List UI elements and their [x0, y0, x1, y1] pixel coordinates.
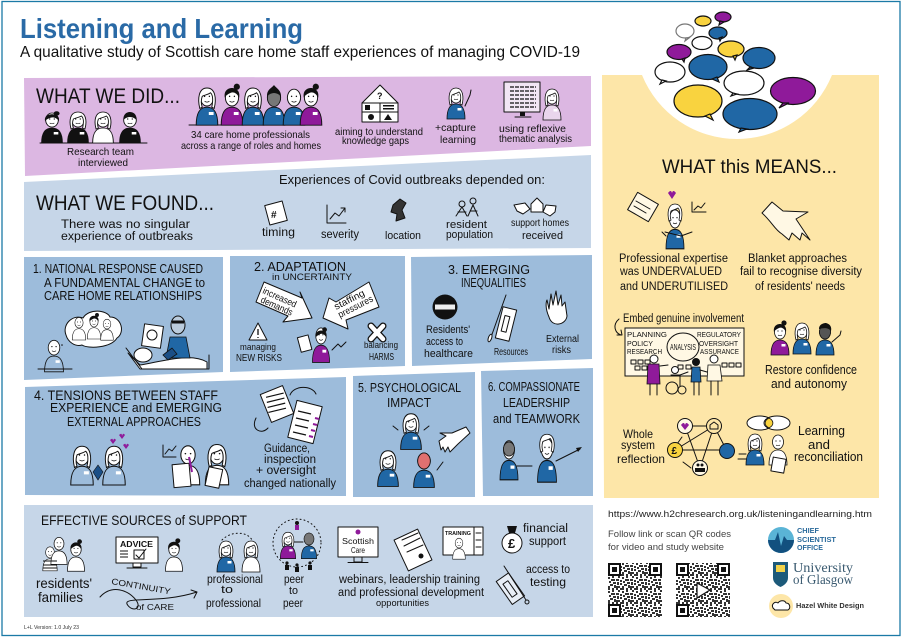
icon: knowledge house — [362, 85, 398, 122]
figure: staff member with clipboard — [297, 327, 346, 362]
label: residents' families: families — [38, 589, 83, 605]
heading 3: INEQUALITIES — [461, 275, 526, 290]
text: no singular experience — [61, 219, 193, 243]
heading 3: 3. EMERGING — [448, 262, 530, 277]
diagram: whole system network — [668, 418, 734, 476]
label: professional expertise: Professional expertise — [619, 253, 728, 265]
board with analysis diagram: POLICY — [627, 341, 653, 348]
label: managing new risks — [236, 342, 282, 364]
heading 4 — [34, 387, 222, 429]
icon: blanket hand — [762, 202, 810, 240]
diagram: whole system network: £ — [672, 446, 678, 457]
label: balancing harms: balancing — [364, 340, 398, 351]
arrow: curved to board — [615, 319, 622, 335]
icon: cross — [371, 326, 383, 339]
label: residents' access — [424, 324, 473, 360]
label: peer to peer — [283, 572, 304, 610]
arrow: staffing pressures — [323, 282, 379, 329]
heading 5 — [358, 380, 461, 410]
label: learning and reconciliation: reconciliation — [794, 450, 863, 464]
label: 34 care home professionals — [181, 129, 321, 152]
label: peer to peer: to — [289, 585, 298, 597]
label: blanket approaches: Blanket approaches — [748, 253, 847, 265]
subtitle: A qualitative study of Scottish care home staff experiences of managing COVID-19 — [20, 44, 580, 61]
label: capture learning: +capture — [435, 122, 476, 134]
heading: effective sources: EFFECTIVE SOURCES of SUPPORT — [41, 512, 247, 528]
figures: peer support circle — [273, 519, 321, 572]
heading 2: 2. ADAPTATION — [254, 259, 346, 274]
label: reflexive thematic analysis — [499, 123, 572, 145]
label: residents' families — [36, 575, 92, 605]
text: embed genuine involvement: Embed genuine involvement — [623, 313, 745, 325]
icon: scottish care monitor: Scottish — [342, 537, 374, 546]
panel: what we found — [24, 155, 591, 251]
label: managing new risks: NEW RISKS — [236, 353, 282, 364]
link: https://www.h2chresearch.org.uk/listeningandlearning.htm — [608, 509, 872, 520]
research team figures — [40, 111, 147, 143]
label: managing new risks: managing — [240, 342, 276, 353]
figures at the board — [647, 355, 722, 395]
label: balancing harms: HARMS — [369, 352, 394, 363]
label: aiming to understand knowledge gaps: knowledge gaps — [342, 136, 409, 147]
panel 5: psychological impact — [353, 372, 475, 497]
label: restore confidence — [765, 363, 857, 391]
illustration: professional with certificate, heart and chart — [628, 191, 706, 249]
logo: university of glasgow: University — [793, 561, 853, 576]
panel: what we did — [24, 76, 591, 176]
label: whole system reflection — [617, 427, 665, 466]
label: reflexive thematic analysis: thematic analysis — [499, 134, 572, 145]
icon: training screen — [443, 527, 483, 559]
label: access to testing — [526, 562, 570, 589]
icon: money bag: £ — [508, 536, 516, 551]
arrow: increased demands: demands — [259, 295, 295, 319]
label: professional expertise — [619, 253, 728, 293]
heading 6 — [488, 380, 581, 426]
label: financial support — [523, 523, 568, 548]
heading: what this means: WHAT this MEANS... — [662, 157, 837, 178]
heading 1 — [33, 262, 205, 303]
label: peer to peer: peer — [283, 596, 303, 610]
arrow: increased demands: increased — [261, 286, 298, 310]
label: financial support: support — [529, 536, 567, 548]
label: professional to professional — [206, 572, 263, 610]
heading 4: EXPERIENCE and EMERGING — [50, 401, 222, 415]
label: capture learning — [435, 122, 476, 146]
label: 34 care home professionals: across a range of roles and homes — [181, 140, 321, 152]
panel: what this means — [602, 12, 879, 498]
heading 1: 1. NATIONAL RESPONSE CAUSED — [33, 262, 203, 276]
text: experiences depended on: Experiences of Covid outbreaks depended on: — [279, 173, 545, 187]
figures: restore confidence — [771, 320, 841, 355]
label: resident population — [446, 219, 493, 241]
label: guidance inspection oversight: Guidance, — [264, 443, 310, 455]
icon: stop hand — [546, 291, 567, 324]
heading 5: 5. PSYCHOLOGICAL — [358, 380, 461, 395]
label: capture learning: learning — [440, 134, 476, 146]
label: aiming to understand knowledge gaps — [335, 127, 423, 147]
panel: effective sources of support — [24, 505, 593, 617]
label: aiming to understand knowledge gaps: aiming to understand — [335, 127, 423, 138]
heading 1: A FUNDAMENTAL CHANGE to — [44, 276, 205, 290]
icon: calendar: # — [271, 210, 277, 221]
board with analysis diagram: ASSURANCE — [700, 349, 739, 356]
label: webinars and training — [338, 574, 485, 609]
label: blanket approaches: of residents' needs — [755, 281, 845, 293]
icon: calendar — [265, 201, 287, 225]
illustration: thought cloud — [65, 311, 121, 347]
QR code: study website — [608, 563, 662, 617]
label: professional expertise: and UNDERUTILISED — [620, 281, 728, 293]
icon: resident population — [456, 198, 478, 216]
icon: test kit and swab — [487, 295, 517, 342]
label: 34 care home professionals: 34 care home professionals — [191, 129, 310, 141]
label: professional to professional: professional — [207, 572, 263, 586]
label: timing: timing — [262, 225, 295, 239]
label: support homes received — [511, 218, 569, 242]
icon: pointing hand — [439, 427, 470, 452]
label: support homes received: received — [522, 230, 563, 242]
heading 2: in UNCERTAINTY — [272, 272, 352, 282]
label: resources: Resources — [494, 347, 528, 358]
heading 1: CARE HOME RELATIONSHIPS — [44, 289, 202, 303]
label: blanket approaches — [740, 253, 862, 293]
label: resident population: population — [446, 229, 493, 241]
heading 4: 4. TENSIONS BETWEEN STAFF — [34, 387, 218, 403]
label: guidance inspection oversight: changed nationally — [244, 478, 336, 490]
logo: chief scientist office — [768, 527, 837, 553]
icon: scotland map — [391, 199, 406, 221]
heading 6: 6. COMPASSIONATE — [488, 380, 580, 394]
logo: chief scientist office: CHIEF — [797, 528, 820, 535]
QR instructions: for video and study website — [608, 542, 724, 553]
icon: warning triangle — [249, 323, 267, 340]
text: no singular experience: experience of outbreaks — [61, 231, 193, 243]
label: financial support: financial — [523, 523, 568, 535]
text: no singular experience: There was no singular — [61, 219, 190, 231]
label: whole system reflection: Whole — [623, 427, 653, 441]
figures: family — [43, 537, 85, 571]
label: whole system reflection: system — [621, 438, 655, 452]
logo: hazel white design: Hazel White Design — [796, 601, 864, 610]
arrow: staffing pressures: staffing — [332, 288, 367, 313]
label: residents' access: access to — [426, 336, 463, 348]
icon: knowledge house: ? — [377, 91, 382, 101]
board with analysis diagram: REGULATORY — [697, 332, 741, 339]
QR instructions — [608, 529, 731, 553]
icon: scottish care monitor — [338, 527, 378, 562]
heading 4: EXTERNAL APPROACHES — [67, 415, 201, 429]
board with analysis diagram — [625, 328, 744, 376]
label: support homes received: support homes — [511, 218, 569, 229]
label: residents' families: residents' — [36, 575, 92, 591]
figures: stressed staff — [378, 414, 443, 487]
logo: university of glasgow: of Glasgow — [793, 573, 854, 588]
arrow: staffing pressures: pressures — [336, 294, 375, 321]
logo: hazel white design — [769, 594, 864, 618]
panel 2: adaptation — [230, 256, 405, 372]
label: research team interviewed — [67, 146, 134, 169]
illustration: speech bubbles — [655, 12, 816, 132]
heading 3 — [448, 262, 530, 290]
icon: support hands and home — [514, 198, 556, 216]
board with analysis diagram: OVERSIGHT — [699, 341, 739, 348]
icon: scottish care monitor: Care — [351, 546, 365, 555]
illustration: bed and nurse — [126, 316, 209, 369]
label: learning and reconciliation: Learning — [798, 424, 845, 438]
logo: chief scientist office: SCIENTIST — [797, 537, 837, 544]
figures: teamwork — [500, 434, 582, 482]
arrow: continuity of care: of CARE — [136, 602, 174, 612]
care home professionals figures — [189, 84, 322, 125]
version note: L+L Version: 1.0 July 23 — [24, 625, 79, 631]
board with analysis diagram: RESEARCH — [627, 349, 662, 356]
label: webinars and training: opportunities — [376, 598, 429, 609]
label: professional to professional: professional — [206, 596, 261, 610]
panel 4: tensions — [25, 377, 346, 496]
icon: advice monitor and person: ADVICE — [120, 540, 154, 549]
label: location: location — [385, 230, 421, 242]
label: restore confidence: Restore confidence — [765, 363, 857, 377]
icon: training screen: TRAINING — [445, 531, 471, 537]
arrow: continuity of care — [100, 576, 197, 612]
label: balancing harms — [364, 340, 398, 363]
label: whole system reflection: reflection — [617, 452, 665, 466]
icon: advice monitor and person — [116, 537, 183, 571]
logo: university of glasgow — [773, 561, 854, 588]
label: reflexive thematic analysis: using reflexive — [499, 123, 566, 135]
title: Listening and Learning — [20, 13, 303, 44]
illustration: seated resident — [38, 340, 72, 372]
label: peer to peer: peer — [284, 572, 304, 586]
logo: chief scientist office: OFFICE — [797, 545, 823, 552]
icon: no entry — [432, 294, 458, 320]
illustration: inspectors with papers — [163, 444, 229, 488]
icon: thematic analysis screen and person — [504, 82, 561, 120]
label: residents' access: Residents' — [426, 324, 470, 336]
heading 6: LEADERSHIP — [503, 396, 570, 410]
label: severity: severity — [321, 229, 359, 241]
label: blanket approaches: fail to recognise diversity — [740, 266, 862, 278]
panel 6: compassionate leadership — [481, 368, 593, 496]
label: guidance inspection oversight: inspection — [264, 454, 316, 466]
label: learning and reconciliation: and — [808, 438, 830, 452]
heading 2 — [254, 259, 352, 282]
label: access to testing: testing — [530, 575, 566, 589]
label: research team interviewed: interviewed — [78, 157, 128, 169]
illustration: guidance documents — [254, 386, 322, 444]
icon: certificate — [394, 529, 432, 571]
icon: capture learning person — [447, 88, 471, 119]
heading: what we found: WHAT WE FOUND... — [36, 192, 214, 215]
board with analysis diagram: PLANNING — [627, 332, 667, 339]
icon: money bag — [502, 526, 522, 553]
QR code: video — [676, 563, 730, 617]
heading: what we did: WHAT WE DID... — [36, 85, 180, 108]
label: access to testing: access to — [526, 562, 570, 576]
panel 3: emerging inequalities — [411, 255, 592, 366]
label: external risks: risks — [552, 345, 571, 356]
icon: line chart — [327, 205, 346, 223]
board with analysis diagram: ANALYSIS — [670, 343, 696, 352]
label: webinars and training: webinars, leadership training — [338, 574, 480, 586]
arrow: continuity of care: CONTINUITY — [111, 576, 172, 596]
icon: test kit — [496, 566, 529, 604]
label: professional expertise: was UNDERVALUED — [619, 266, 722, 278]
figures: professional to professional — [217, 533, 260, 572]
label: external risks — [546, 334, 579, 356]
label: resident population: resident — [446, 219, 487, 231]
label: webinars and training: and professional development — [338, 587, 485, 599]
heading 6: and TEAMWORK — [493, 412, 581, 426]
label: guidance inspection oversight: + oversight — [256, 465, 317, 477]
label: restore confidence: and autonomy — [771, 377, 848, 391]
arrow: increased demands — [256, 282, 312, 322]
label: research team interviewed: Research team — [67, 146, 134, 158]
QR instructions: Follow link or scan QR codes — [608, 529, 731, 540]
label: residents' access: healthcare — [424, 348, 473, 360]
illustration: two people and hearts — [71, 434, 129, 485]
figures: learning and reconciliation — [738, 416, 790, 473]
label: guidance inspection oversight — [244, 443, 336, 490]
label: external risks: External — [546, 334, 579, 345]
label: learning and reconciliation — [794, 424, 863, 464]
heading 5: IMPACT — [387, 395, 431, 410]
label: professional to professional: to — [221, 584, 233, 596]
panel 1: national response — [24, 257, 223, 380]
